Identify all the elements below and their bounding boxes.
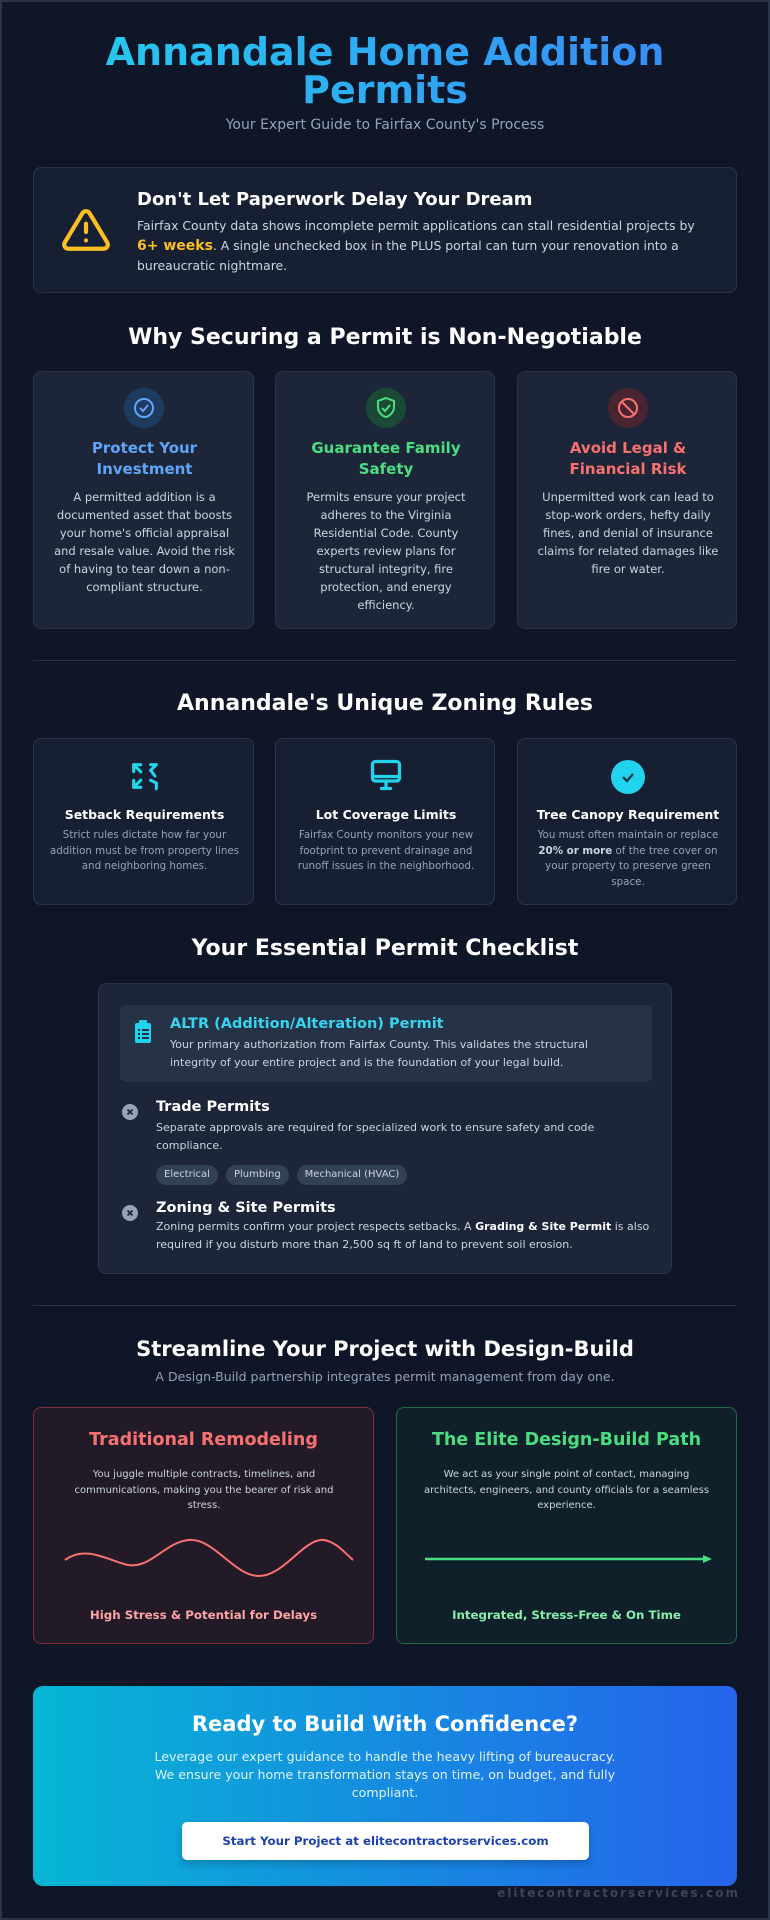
tags: Plumbing xyxy=(234,1169,281,1180)
ALTR text: Your primary authorization from Fairfax County. This validates the structural integrity of your entire project and is the foundation of your legal build. xyxy=(170,1038,588,1069)
ALTR title: ALTR (Addition/Alteration) Permit xyxy=(170,1016,444,1032)
zoning title: Zoning & Site Permits xyxy=(156,1200,336,1216)
panel: protect investment xyxy=(33,371,254,629)
title: Annandale Home Addition xyxy=(106,30,664,74)
tags: Mechanical (HVAC) xyxy=(305,1169,399,1180)
panel: checklist xyxy=(98,983,672,1274)
tags: Electrical xyxy=(164,1169,210,1180)
heading: design-build: Streamline Your Project with Design-Build xyxy=(136,1337,634,1361)
card title xyxy=(92,439,197,478)
item: ALTR xyxy=(120,1005,652,1082)
alert text: Fairfax County data shows incomplete permit applications can stall residential projects by 6+ weeks. A single unchecked box in the PLUS portal can turn your renovation into a bureaucratic nightmare. xyxy=(137,218,695,273)
zoning text: Zoning permits confirm your project respects setbacks. A Grading & Site Permit is also required if you disturb more than 2,500 sq ft of land to prevent soil erosion. xyxy=(156,1220,649,1251)
zoning title: Setback Requirements xyxy=(65,807,224,822)
trade title: Trade Permits xyxy=(156,1099,270,1115)
zoning text: Strict rules dictate how far your addition must be from property lines and neighboring homes. xyxy=(50,829,239,872)
icon: x circle xyxy=(122,1205,138,1221)
arrow xyxy=(425,1555,712,1563)
icon: shield xyxy=(366,388,406,428)
heading: checklist: Your Essential Permit Checklist xyxy=(192,936,578,961)
tags xyxy=(156,1165,407,1185)
item: zoning & site xyxy=(122,1200,649,1251)
heading: why: Why Securing a Permit is Non-Negotiable xyxy=(128,325,642,350)
card title: Avoid Legal & xyxy=(570,439,686,457)
title xyxy=(0,33,770,109)
subtitle: Your Expert Guide to Fairfax County's Process xyxy=(226,117,544,133)
icon: x circle xyxy=(122,1104,138,1120)
CTA button xyxy=(182,1822,589,1860)
card text: Permits ensure your project adheres to the Virginia Residential Code. County experts review plans for structural integrity, fire protection, and energy efficiency. xyxy=(307,490,465,612)
trad title: Traditional Remodeling xyxy=(89,1430,318,1450)
card title: Safety xyxy=(359,460,413,478)
CTA button: Start Your Project at elitecontractorservices.com xyxy=(222,1834,549,1848)
card text: A permitted addition is a documented asset that boosts your home's official appraisal and resale value. Avoid the risk of having to tear down a non-compliant structure. xyxy=(54,490,235,594)
db text: We act as your single point of contact, managing architects, engineers, and county officials for a seamless experience. xyxy=(424,1469,709,1511)
icon: check badge xyxy=(611,760,645,794)
CTA panel xyxy=(33,1686,737,1886)
zoning title: Tree Canopy Requirement xyxy=(537,807,719,822)
card title: Financial Risk xyxy=(570,460,686,478)
heading: zoning: Annandale's Unique Zoning Rules xyxy=(177,691,593,716)
panel: traditional xyxy=(33,1407,374,1644)
card title xyxy=(311,439,461,478)
panel: legal risk xyxy=(517,371,737,629)
subheading: A Design-Build partnership integrates permit management from day one. xyxy=(155,1369,615,1384)
icon: clipboard xyxy=(135,1020,151,1043)
panel: lot coverage xyxy=(275,738,495,905)
alert heading: Don't Let Paperwork Delay Your Dream xyxy=(137,189,533,210)
title: Permits xyxy=(302,68,468,112)
card text: Unpermitted work can lead to stop-work orders, hefty daily fines, and denial of insurance claims for related damages like fire or water. xyxy=(538,490,718,576)
trade text: Separate approvals are required for specialized work to ensure safety and code compliance. xyxy=(156,1121,594,1152)
db label: Integrated, Stress-Free & On Time xyxy=(452,1608,681,1622)
zoning text: Fairfax County monitors your new footprint to prevent drainage and runoff issues in the neighborhood. xyxy=(298,829,474,872)
panel: tree canopy xyxy=(517,738,737,905)
card title: Guarantee Family xyxy=(311,439,461,457)
panel: design-build xyxy=(396,1407,737,1644)
alert panel xyxy=(33,167,737,293)
trad text: You juggle multiple contracts, timelines, and communications, making you the bearer of risk and stress. xyxy=(74,1469,334,1511)
zoning text: You must often maintain or replace 20% or more of the tree cover on your property to preserve green space. xyxy=(538,829,718,888)
icon: monitor xyxy=(370,760,402,790)
chart: wavy line xyxy=(64,1538,354,1577)
panel: setback xyxy=(33,738,254,905)
icon: ban xyxy=(608,388,648,428)
panel: family safety xyxy=(275,371,495,629)
icon: check circle xyxy=(124,388,164,428)
card title: Protect Your xyxy=(92,439,197,457)
db title: The Elite Design-Build Path xyxy=(432,1430,701,1450)
card title: Investment xyxy=(97,460,192,478)
CTA text: Leverage our expert guidance to handle the heavy lifting of bureaucracy. We ensure your home transformation stays on time, on budget, and fully compliant. xyxy=(154,1749,616,1800)
icon: warning xyxy=(62,209,110,251)
trad label: High Stress & Potential for Delays xyxy=(90,1608,317,1622)
icon: arrows xyxy=(132,763,158,790)
CTA heading: Ready to Build With Confidence? xyxy=(192,1712,578,1736)
zoning title: Lot Coverage Limits xyxy=(316,807,456,822)
card title xyxy=(570,439,687,478)
watermark: elitecontractorservices.com xyxy=(497,1886,740,1900)
item: trade permits xyxy=(122,1099,594,1185)
